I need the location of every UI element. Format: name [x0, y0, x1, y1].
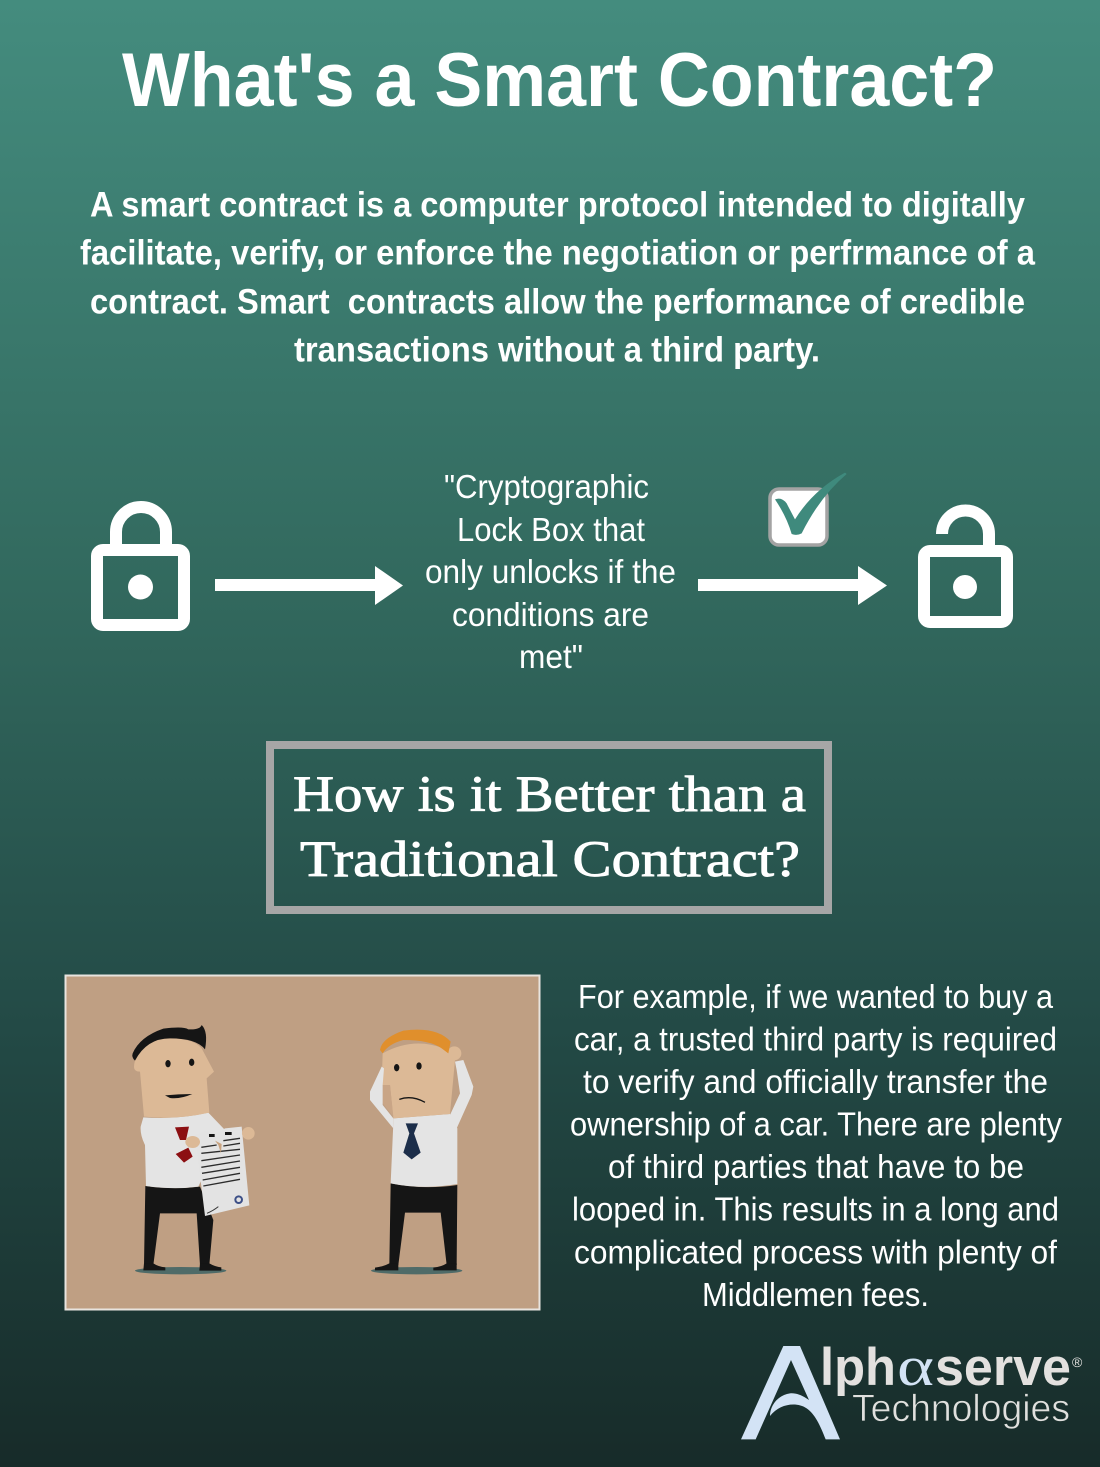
illustration panel [66, 976, 540, 1310]
quote text: Lock Box that [457, 511, 645, 548]
logo: Alphaserve Technologies [741, 1336, 1083, 1439]
icon: checkbox [770, 473, 847, 545]
example text block: ownership of a car. There are plenty [570, 1106, 1062, 1142]
heading box [270, 745, 828, 910]
character: businessman tearing contract [132, 1025, 255, 1274]
heading box: How is it Better than a [293, 767, 806, 823]
quote text: met" [519, 638, 583, 675]
logo: Alphaserve Technologies: lph [820, 1338, 896, 1397]
intro text block [80, 186, 1035, 370]
intro text block: transactions without a third party. [294, 330, 820, 370]
quote text: conditions are [452, 596, 649, 633]
logo: Alphaserve Technologies: ® [1072, 1354, 1083, 1370]
example text block [570, 978, 1062, 1313]
example text block: to verify and officially transfer the [583, 1063, 1048, 1100]
intro text block: facilitate, verify, or enforce the negotiation or perfrmance of a [80, 234, 1035, 272]
title: What's a Smart Contract? [122, 38, 997, 123]
logo: Alphaserve Technologies: Technologies [852, 1388, 1070, 1430]
icon: open padlock [924, 510, 1007, 622]
quote text: only unlocks if the [425, 553, 676, 590]
character: worried businessman [370, 1030, 473, 1274]
intro text block: contract. Smart contracts allow the performance of credible [90, 282, 1025, 322]
example text block: For example, if we wanted to buy a [578, 978, 1054, 1015]
logo: Alphaserve Technologies: serve [935, 1338, 1071, 1397]
arrow: condition to unlocked [698, 566, 887, 605]
logo: Alphaserve Technologies: α [897, 1336, 934, 1398]
icon: closed padlock [97, 507, 184, 625]
example text block: looped in. This results in a long and [572, 1190, 1059, 1228]
arrow: locked to condition [215, 566, 403, 605]
example text block: complicated process with plenty of [574, 1234, 1058, 1270]
quote text: "Cryptographic [444, 468, 649, 505]
heading box: Traditional Contract? [300, 832, 800, 888]
example text block: car, a trusted third party is required [574, 1020, 1057, 1058]
example text block: of third parties that have to be [608, 1148, 1024, 1185]
example text block: Middlemen fees. [702, 1276, 929, 1313]
quote text [425, 468, 676, 675]
intro text block: A smart contract is a computer protocol intended to digitally [90, 186, 1025, 224]
